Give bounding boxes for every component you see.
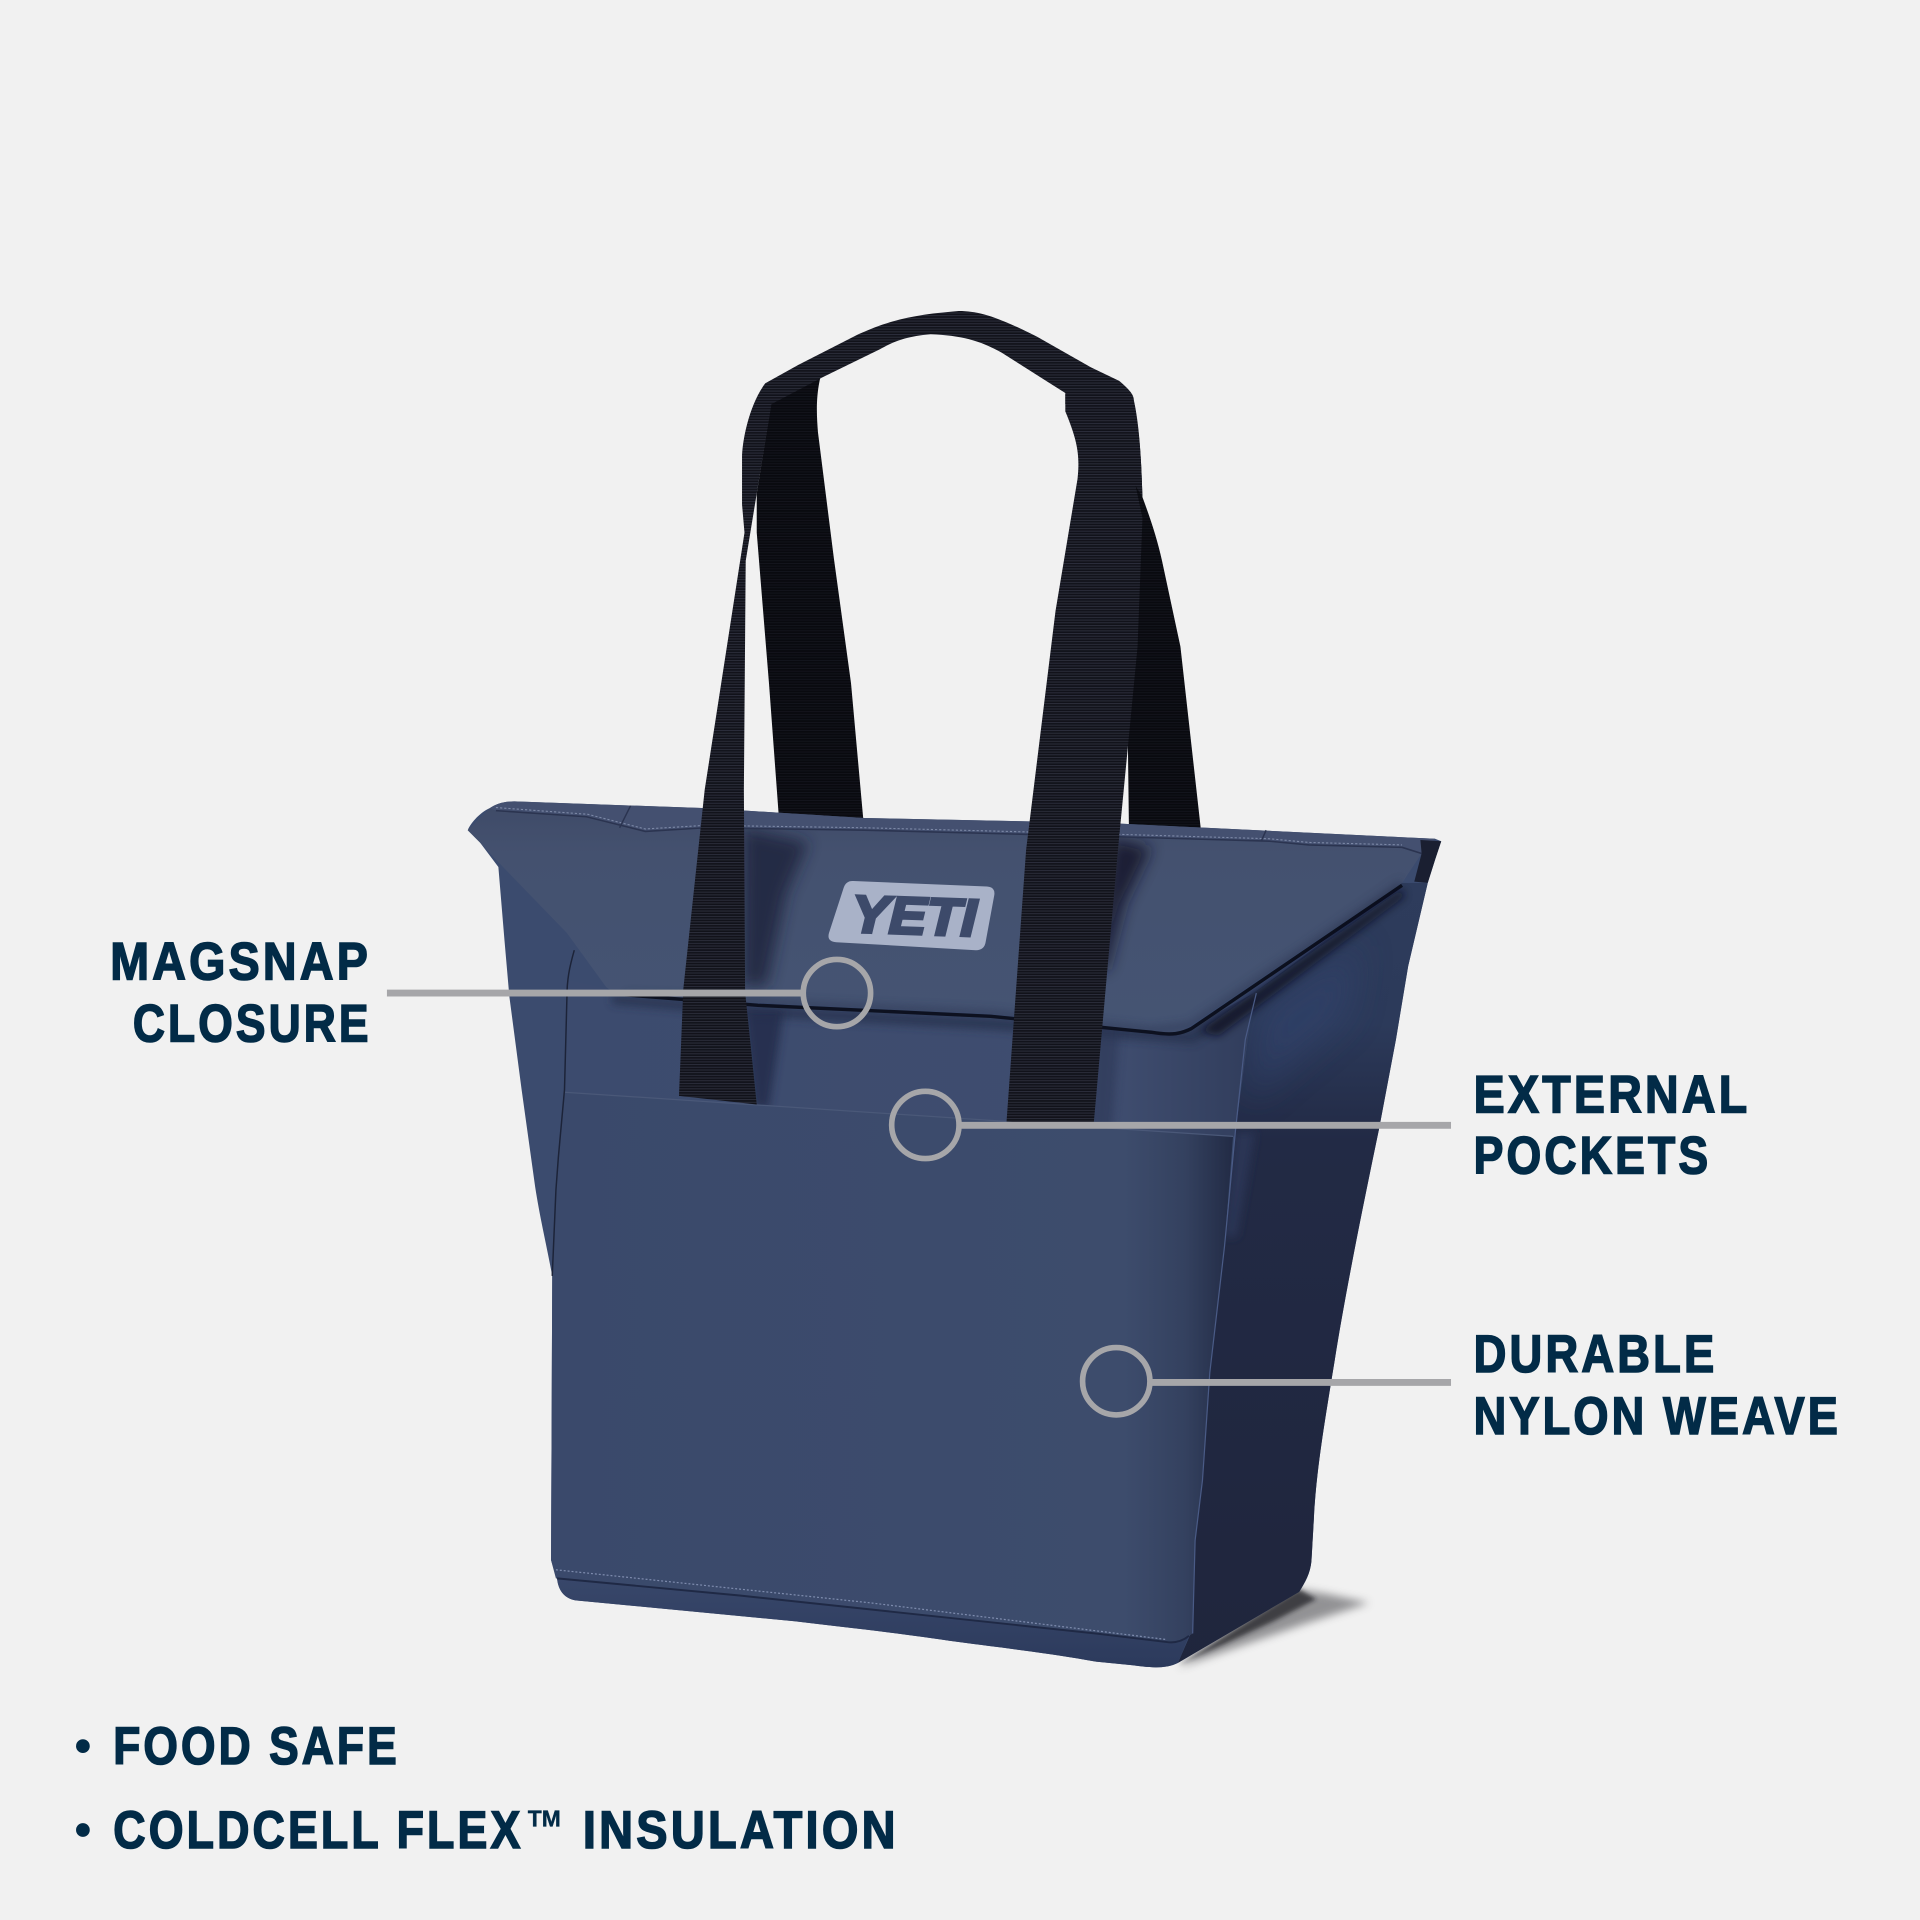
pocket top edge bbox=[564, 1092, 1233, 1136]
rim seam and stitching bbox=[496, 806, 1422, 853]
item: coldcell flex insulation: TM bbox=[528, 1805, 561, 1831]
base seam and stitching bbox=[556, 1570, 1189, 1642]
YETI logo badge: YETI bbox=[851, 885, 979, 948]
label: MagSnap closure: CLOSURE bbox=[133, 994, 372, 1053]
label: MagSnap closure bbox=[110, 933, 372, 1053]
dark wedge at top right corner bbox=[1414, 840, 1441, 883]
base band bbox=[557, 1578, 1189, 1667]
flap underside shadow line bbox=[618, 885, 1402, 1034]
shadows on upper panel bbox=[610, 996, 1212, 1122]
label: external pockets bbox=[1474, 1065, 1750, 1186]
label: durable nylon weave: NYLON WEAVE bbox=[1474, 1387, 1841, 1446]
item: coldcell flex insulation bbox=[113, 1801, 899, 1860]
top rim bbox=[490, 801, 1435, 853]
label: durable nylon weave bbox=[1474, 1325, 1841, 1446]
bag body silhouette bbox=[468, 801, 1441, 1667]
side panel bbox=[1178, 883, 1428, 1663]
label: external pockets: POCKETS bbox=[1474, 1127, 1711, 1186]
YETI logo badge bbox=[828, 881, 994, 950]
strap shadows on flap bbox=[627, 828, 1402, 1031]
bullet: food safe bbox=[76, 1739, 90, 1753]
back right strap bbox=[1128, 400, 1201, 833]
handle arc and front left strap bbox=[679, 311, 1142, 1104]
product photo: navy tote bag bbox=[468, 311, 1457, 1690]
front right strap bbox=[1007, 377, 1142, 1127]
callout: durable nylon weave pointer bbox=[1083, 1348, 1451, 1415]
upper panel under flap bbox=[564, 980, 1254, 1136]
callout: MagSnap closure pointer bbox=[387, 959, 871, 1027]
label: external pockets: EXTERNAL bbox=[1474, 1065, 1750, 1124]
callout: external pockets pointer bbox=[892, 1091, 1451, 1159]
soft shadow under right flap edge bbox=[1200, 889, 1404, 1036]
bullet: coldcell flex bbox=[76, 1823, 90, 1837]
left side seam bbox=[552, 950, 574, 1276]
label: durable nylon weave: DURABLE bbox=[1474, 1325, 1717, 1384]
item: coldcell flex insulation: COLDCELL FLEX bbox=[113, 1801, 523, 1860]
flap bbox=[468, 808, 1422, 1033]
back left strap bbox=[757, 377, 864, 833]
right side seam bbox=[1193, 993, 1256, 1633]
label: MagSnap closure: MAGSNAP bbox=[110, 933, 371, 992]
ground shadow bbox=[1178, 1587, 1369, 1668]
item: coldcell flex insulation: INSULATION bbox=[583, 1801, 899, 1860]
feature list bbox=[76, 1717, 899, 1860]
item: food safe: FOOD SAFE bbox=[113, 1717, 400, 1776]
front pocket panel bbox=[551, 1092, 1233, 1642]
